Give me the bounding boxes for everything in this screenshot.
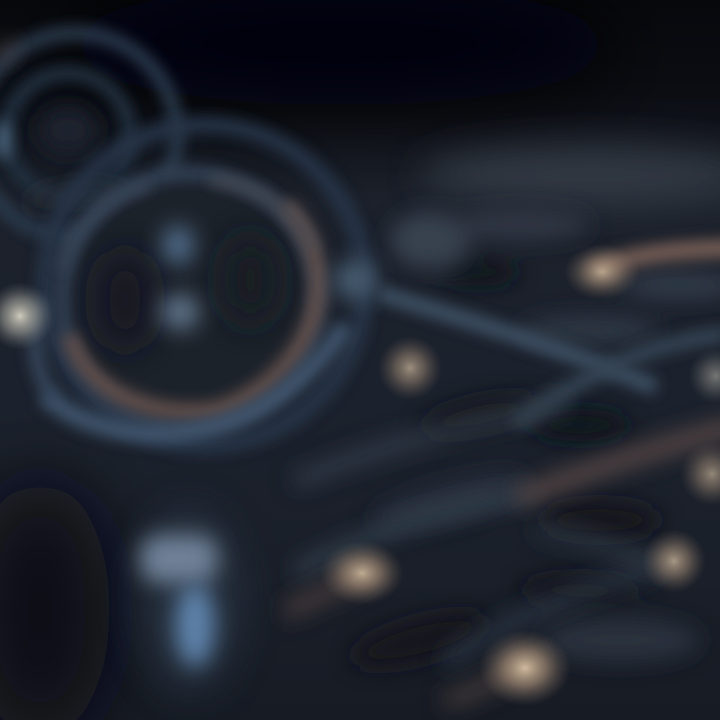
ring centre highlights	[0, 120, 377, 330]
large ring	[35, 125, 365, 445]
warm copper streaks	[290, 248, 720, 700]
vertical light bar: bottom left	[135, 505, 245, 695]
network streaks	[300, 295, 720, 660]
concentric rings: top left	[0, 33, 177, 237]
mottled network field at right	[347, 210, 720, 677]
glowing nodes	[0, 244, 720, 706]
